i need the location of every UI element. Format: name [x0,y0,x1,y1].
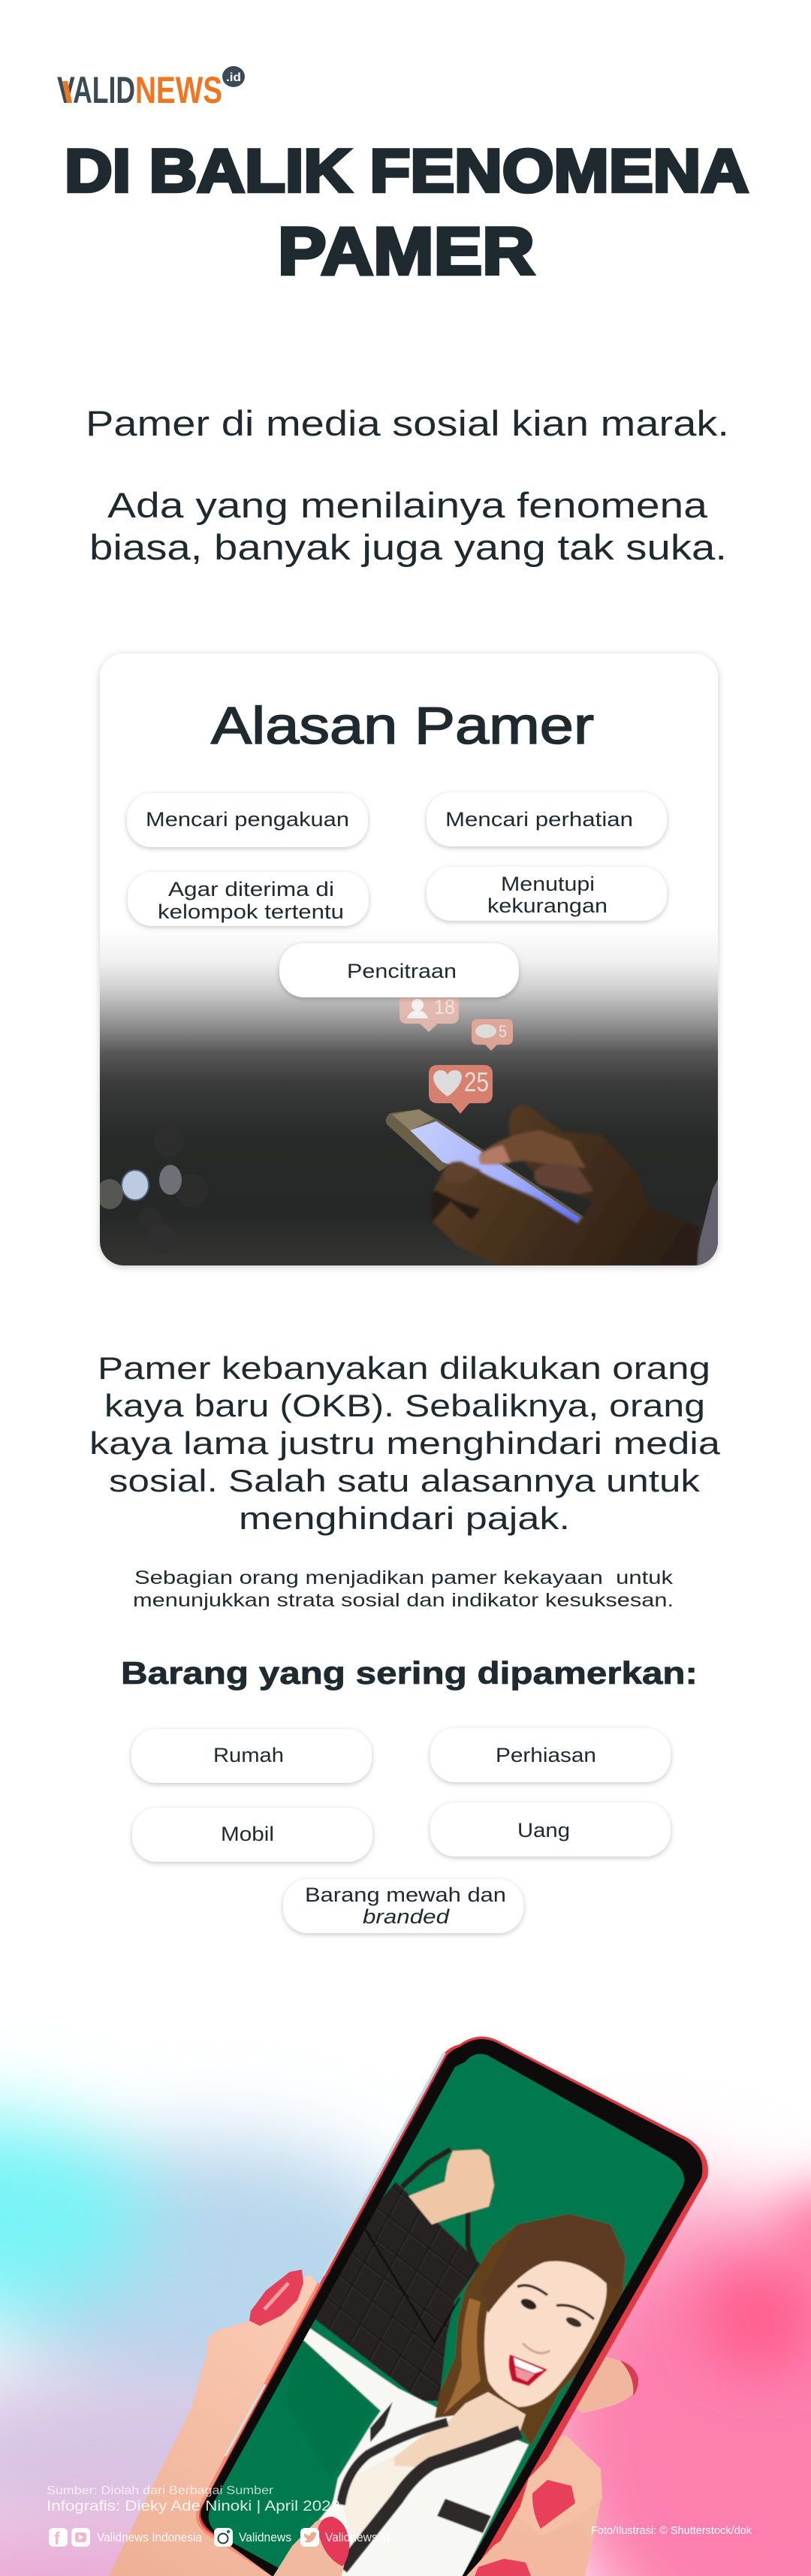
bag [314,2182,481,2401]
thumb nail upper [249,2270,303,2326]
pill: menutupi kekurangan: Menutupi [501,873,595,895]
heading: barang yang sering dipamerkan: Barang yang sering dipamerkan: [121,1655,698,1691]
pill: mobil [132,1808,372,1862]
pill: barang mewah dan branded: branded [363,1905,450,1928]
logo [57,66,245,111]
paragraph: orang kaya baru: menghindari pajak. [239,1501,570,1536]
paragraph: strata sosial: menunjukkan strata sosial dan indikator kesuksesan. [133,1590,674,1611]
lower right fingers [466,2436,602,2576]
title: PAMER [278,213,535,288]
lower thumb [273,2517,349,2576]
palm behind phone [451,2436,601,2576]
paragraph: orang kaya baru: kaya lama justru menghindari media [89,1425,721,1461]
pill: menutupi kekurangan [427,867,667,921]
pill: mencari perhatian [427,792,667,846]
paragraph: strata sosial: Sebagian orang menjadikan pamer kekayaan untuk [134,1567,674,1588]
intro text [86,403,729,567]
notification: heart 25: 25 [464,1066,489,1097]
hair back [435,2214,626,2446]
pill: uang: Uang [517,1819,570,1842]
smile [509,2354,547,2386]
notification: comment 5: 5 [499,1022,507,1041]
pill: perhiasan: Perhiasan [496,1744,596,1766]
logo: .id [226,71,241,84]
pill: barang mewah dan branded: Barang mewah dan [305,1884,506,1906]
paragraph: orang kaya baru [89,1350,721,1536]
pill: pencitraan [279,943,519,997]
social media row: Validnews Indonesia [97,2530,202,2544]
paragraph: orang kaya baru: kaya baru (OKB). Sebaliknya, orang [104,1388,705,1423]
notification: followers 18 [399,997,459,1032]
gradient background: cyan and pink [0,2114,811,2576]
title [65,137,749,288]
social media row: Validnews.id [325,2530,390,2544]
intro text: biasa, banyak juga yang tak suka. [89,527,727,567]
icon: facebook [49,2528,68,2548]
icon: instagram [214,2528,233,2547]
phone bezel [200,2039,702,2576]
left hand [109,2275,323,2576]
social media row [49,2528,390,2548]
pill: uang [430,1802,671,1857]
credits: Infografis: Dieky Ade Ninoki | April 2022 [47,2499,340,2514]
pill: rumah [131,1729,372,1783]
pill: agar diterima: kelompok tertentu [158,900,344,923]
glass glare on phone edge [225,2384,265,2456]
icon: facebook: f [54,2529,60,2548]
right finger behind phone [571,2354,638,2413]
face [484,2249,607,2407]
pill: mobil: Mobil [221,1823,274,1845]
phone screen with woman [195,2043,706,2576]
straps [402,2149,475,2262]
pill: agar diterima: Agar diterima di [168,878,334,900]
neck and chest [394,2392,526,2467]
notification: comment 5 [472,1019,513,1051]
white sleeve and jacket [300,2324,529,2576]
notification: heart 25 [429,1065,493,1114]
pill: mencari perhatian: Mencari perhatian [445,808,633,831]
pill: agar diterima [128,872,369,926]
pill: menutupi kekurangan: kekurangan [487,894,607,917]
paragraph: orang kaya baru: sosial. Salah satu alasannya untuk [109,1463,701,1498]
jacket trim [341,2402,520,2568]
title: DI BALIK FENOMENA [65,137,749,205]
notification: followers 18: 18 [434,995,455,1018]
icon: twitter [300,2528,319,2547]
panel: alasan pamer [96,653,718,1265]
inner cream top [342,2456,415,2544]
phone body [198,2037,708,2576]
pill: mencari pengakuan: Mencari pengakuan [146,808,349,831]
intro text: Ada yang menilainya fenomena [107,485,708,525]
raised fist [409,2149,494,2225]
icon: youtube [71,2528,90,2547]
paragraph: orang kaya baru: Pamer kebanyakan dilakukan orang [98,1350,710,1386]
pill: rumah: Rumah [213,1744,284,1766]
illustration: hand holding phone with woman on the screen [109,2037,708,2576]
heading: alasan pamer: Alasan Pamer [211,696,594,755]
intro text: Pamer di media sosial kian marak. [86,403,729,443]
photo: hand holding phone with notifications [96,928,718,1265]
pill: mencari pengakuan [127,793,368,847]
hair top [481,2214,626,2313]
credits [47,2484,340,2514]
logo: NEWS [135,69,222,111]
logo: VALID [57,69,135,111]
pill: perhiasan [430,1728,671,1782]
paragraph: strata sosial [133,1567,674,1611]
social media row: Validnews [239,2530,291,2544]
credits: Sumber: Diolah dari Berbagai Sumber [47,2484,274,2497]
pill: barang mewah dan branded [283,1879,523,1933]
eyebrows and eyes [517,2285,594,2353]
pill: pencitraan: Pencitraan [347,960,457,982]
photo credit: Foto/Ilustrasi: © Shutterstock/dok [591,2525,752,2537]
